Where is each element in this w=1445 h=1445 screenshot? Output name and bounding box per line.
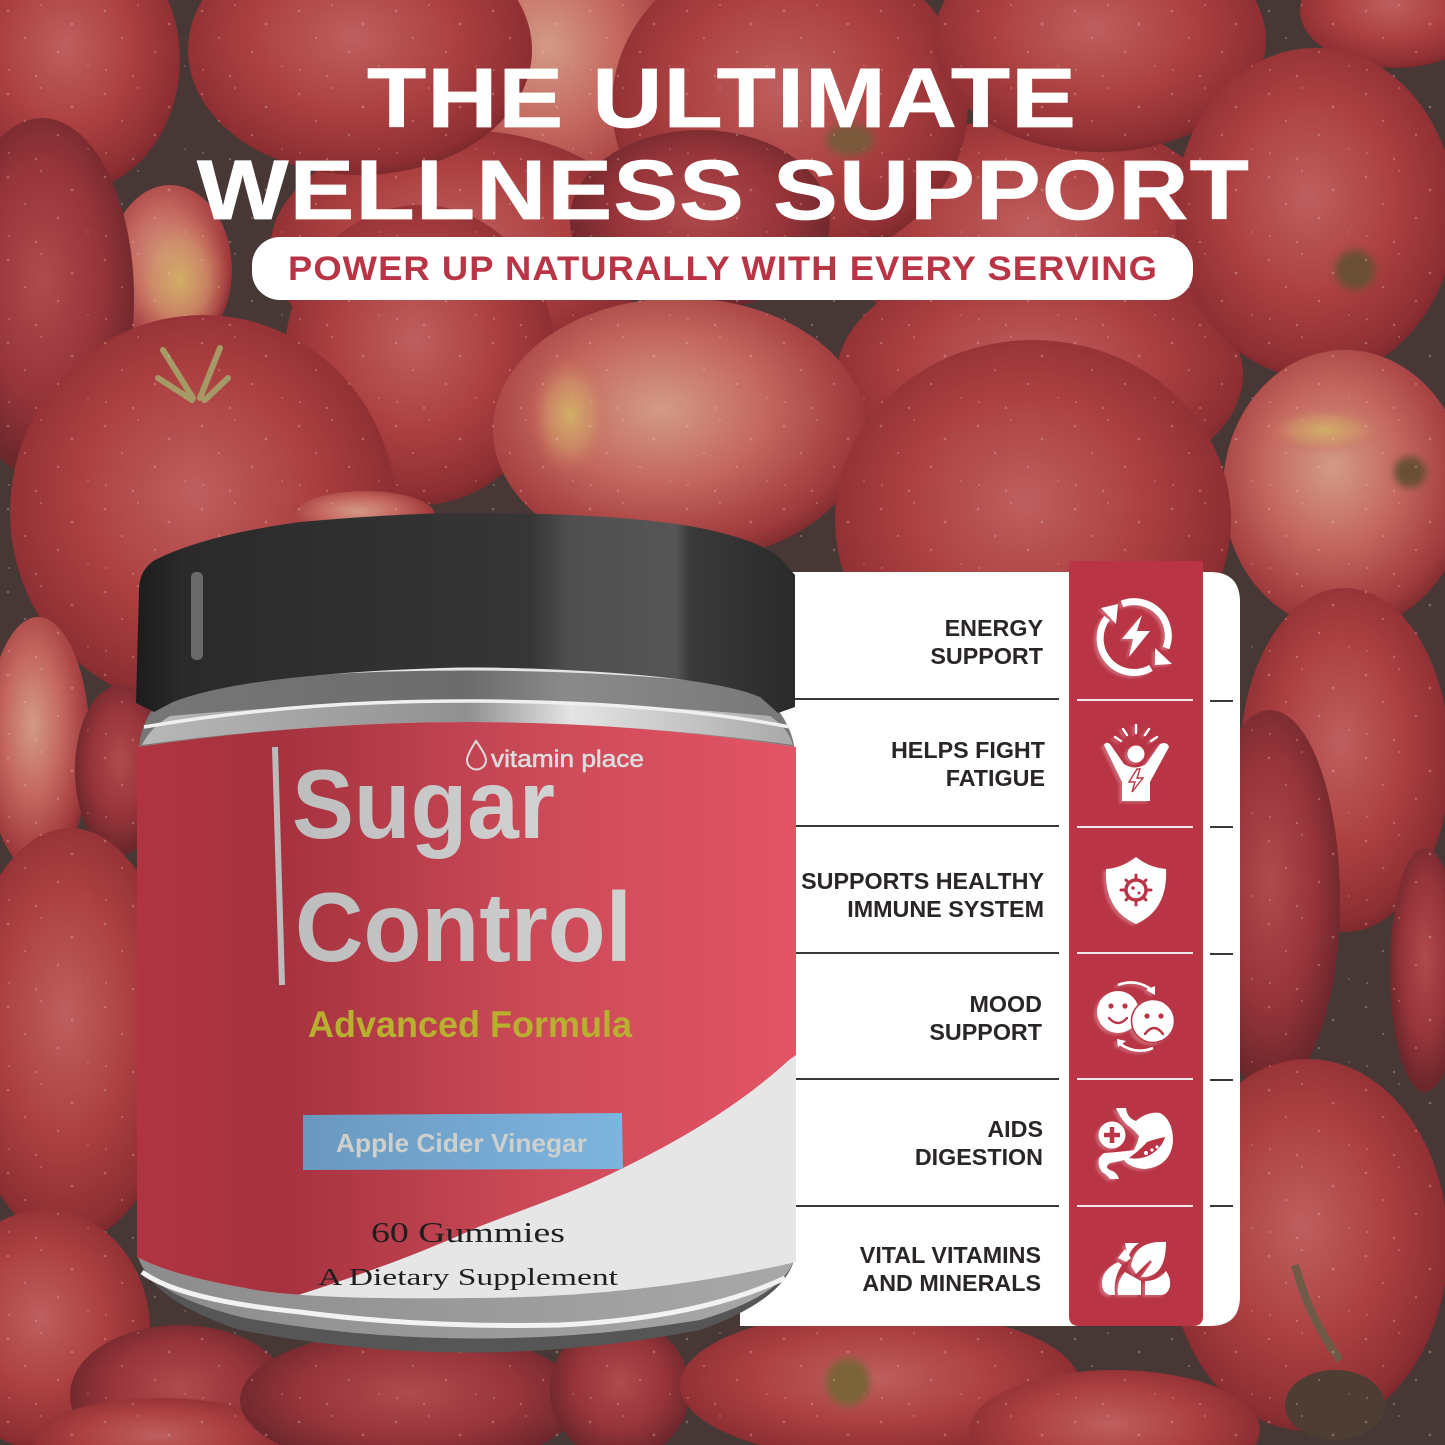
icon: shield with virus [1106, 857, 1166, 924]
icon: stomach [1098, 1108, 1173, 1179]
label: mood support: SUPPORT [929, 1019, 1042, 1045]
label: ingredient badge: Apple Cider Vinegar [336, 1128, 587, 1158]
label: energy support: ENERGY [945, 615, 1043, 641]
subtitle pill [252, 237, 1193, 300]
jar lid [136, 513, 795, 713]
label: count: 60 Gummies [371, 1218, 565, 1249]
label: helps fight fatigue: FATIGUE [946, 765, 1045, 791]
title [197, 51, 1250, 237]
icon: person with bolt [1104, 725, 1169, 801]
label: logo: vitamin place [491, 746, 644, 773]
label: product name: Control [295, 872, 632, 982]
jar neck [139, 668, 795, 750]
label: vertical bar [275, 747, 282, 985]
panel: benefits [740, 561, 1240, 1326]
title: WELLNESS SUPPORT [197, 143, 1250, 237]
jar base [138, 1257, 795, 1352]
label: vitamins and minerals: VITAL VITAMINS [860, 1242, 1041, 1268]
label: aids digestion: DIGESTION [915, 1144, 1043, 1170]
label: vitamins and minerals: AND MINERALS [862, 1270, 1041, 1296]
jar bottom rim highlight [142, 1272, 785, 1325]
icon: mood faces [1097, 982, 1174, 1051]
title: THE ULTIMATE [367, 51, 1077, 145]
label: product name [292, 749, 632, 982]
label: ingredient badge [303, 1113, 623, 1170]
label: aids digestion: AIDS [987, 1116, 1043, 1142]
icon: energy bolt with arrows [1100, 602, 1172, 672]
icon: leaf and pills [1102, 1242, 1170, 1295]
label: advanced formula: Advanced Formula [308, 1004, 632, 1045]
product jar [130, 513, 810, 1352]
label: mood support: MOOD [970, 991, 1042, 1017]
red icon column [1069, 561, 1203, 1326]
label: product name: Sugar [292, 749, 555, 859]
label: immune system: SUPPORTS HEALTHY [801, 868, 1044, 894]
label: immune system: IMMUNE SYSTEM [847, 896, 1044, 922]
jar label [130, 700, 810, 1320]
subtitle pill: POWER UP NATURALLY WITH EVERY SERVING [288, 250, 1158, 288]
label: energy support: SUPPORT [930, 643, 1043, 669]
label: helps fight fatigue: HELPS FIGHT [891, 737, 1045, 763]
label: dietary supplement: A Dietary Supplement [318, 1265, 618, 1291]
label: logo [467, 741, 644, 773]
